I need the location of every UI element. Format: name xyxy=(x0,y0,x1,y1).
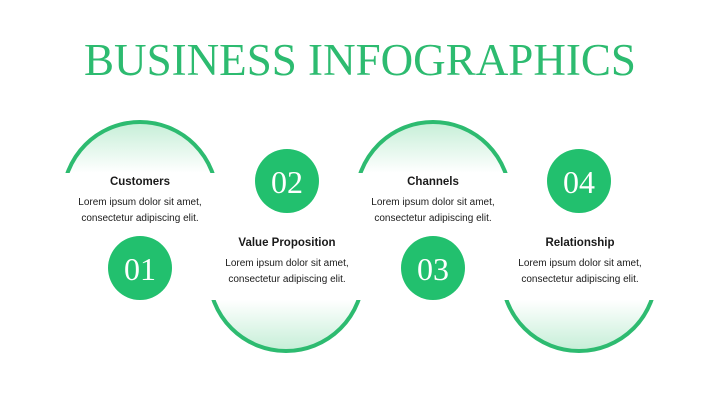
badge 02 xyxy=(255,149,319,213)
text: relationship: Lorem ipsum dolor sit amet, xyxy=(518,258,642,269)
text: value proposition xyxy=(225,237,349,285)
arc: bottom 2 xyxy=(211,300,361,353)
arc: top 3 xyxy=(358,120,508,173)
badge 01 xyxy=(108,236,172,300)
arc: bottom 4 xyxy=(504,300,654,353)
badge 01: 01 xyxy=(124,251,156,287)
text: relationship: consectetur adipiscing elit. xyxy=(521,274,639,285)
text: channels xyxy=(371,176,495,224)
title: BUSINESS INFOGRAPHICS xyxy=(84,35,636,85)
text: value proposition: Value Proposition xyxy=(238,237,336,249)
text: relationship xyxy=(518,237,642,285)
arc: top 1 xyxy=(65,120,215,173)
text: customers: consectetur adipiscing elit. xyxy=(81,213,199,224)
badge 04 xyxy=(547,149,611,213)
badge 04: 04 xyxy=(563,164,595,200)
badge 02: 02 xyxy=(271,164,303,200)
text: value proposition: consectetur adipiscing elit. xyxy=(228,274,346,285)
text: channels: Lorem ipsum dolor sit amet, xyxy=(371,197,495,208)
text: channels: consectetur adipiscing elit. xyxy=(374,213,492,224)
text: customers: Lorem ipsum dolor sit amet, xyxy=(78,197,202,208)
text: channels: Channels xyxy=(407,176,459,188)
badge 03: 03 xyxy=(417,251,449,287)
text: value proposition: Lorem ipsum dolor sit amet, xyxy=(225,258,349,269)
text: relationship: Relationship xyxy=(545,237,615,249)
badge 03 xyxy=(401,236,465,300)
text: customers: Customers xyxy=(110,176,170,188)
text: customers xyxy=(78,176,202,224)
